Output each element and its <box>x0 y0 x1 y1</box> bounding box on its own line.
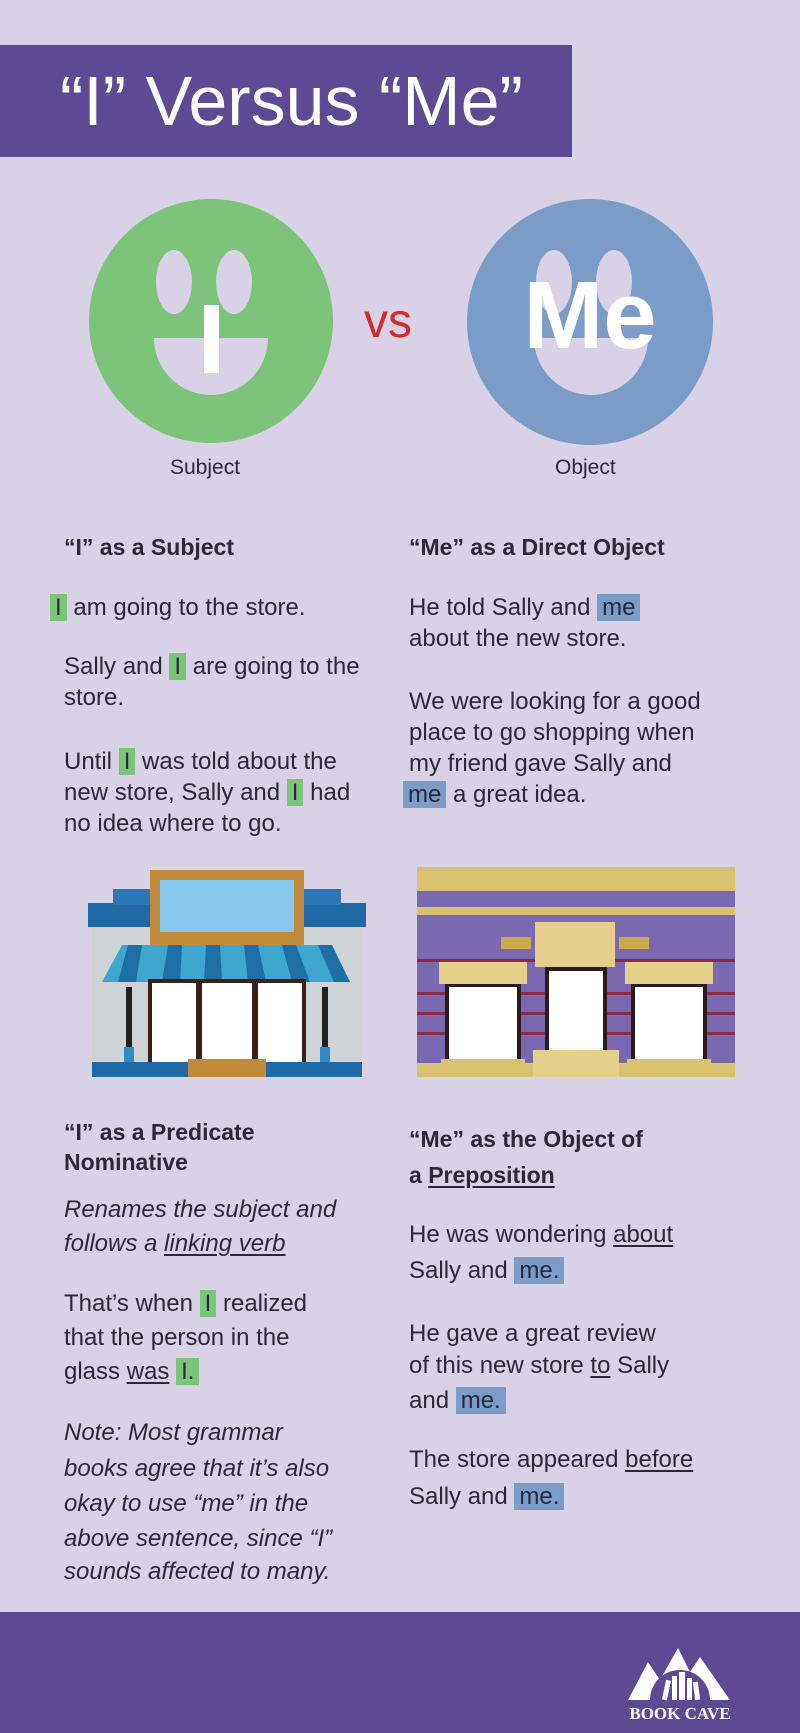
panel: I as subject <box>50 534 360 837</box>
panel: Me as object of a preposition: He gave a great review <box>409 1320 656 1347</box>
panel: I as predicate nominative: okay to use “me” in the <box>64 1490 308 1517</box>
panel: I as predicate nominative: sounds affected to many. <box>64 1558 330 1585</box>
panel: Me as direct object <box>403 534 701 808</box>
panel: Me as object of a preposition: The store appeared before <box>409 1446 693 1473</box>
icon: blue storefront <box>88 870 366 1077</box>
panel: Me as object of a preposition: of this new store to Sally <box>409 1352 669 1379</box>
panel: Me as direct object: place to go shopping when <box>409 719 695 746</box>
title bar <box>0 45 572 157</box>
icon: blue face Me: Me <box>523 262 657 369</box>
panel: I as predicate nominative: “I” as a Predicate <box>64 1119 254 1145</box>
panel: I as subject: I am going to the store. <box>55 594 305 621</box>
panel: I as subject: “I” as a Subject <box>64 534 234 560</box>
panel: Me as object of a preposition: and me. <box>409 1387 501 1414</box>
panel: I as subject: Until I was told about the <box>64 748 337 775</box>
vs: vs <box>364 295 412 348</box>
panel: I as subject: new store, Sally and I had <box>64 779 350 806</box>
panel: Me as object of a preposition <box>409 1126 694 1510</box>
footer bar <box>0 1612 800 1733</box>
panel: I as predicate nominative <box>64 1119 337 1585</box>
panel: I as predicate nominative: That’s when I realized <box>64 1290 307 1317</box>
panel: I as predicate nominative: Nominative <box>64 1149 188 1175</box>
panel: I as predicate nominative: above sentence, since “I” <box>64 1525 332 1552</box>
panel: Me as direct object: We were looking for a good <box>409 688 701 715</box>
panel: I as predicate nominative: Note: Most grammar <box>64 1419 283 1446</box>
icon: green face I <box>89 199 333 443</box>
panel: Me as object of a preposition: a Preposition <box>409 1162 555 1188</box>
panel: I as predicate nominative: glass was I. <box>64 1358 194 1385</box>
panel: Me as direct object: about the new store. <box>409 625 626 652</box>
panel: Me as direct object: me a great idea. <box>408 781 586 808</box>
panel: Me as object of a preposition: “Me” as the Object of <box>409 1126 643 1152</box>
panel: I as predicate nominative: Renames the subject and <box>64 1196 336 1223</box>
logo: Book Cave <box>628 1648 731 1722</box>
panel: Me as direct object: my friend gave Sally and <box>409 750 672 777</box>
icon: blue face Me <box>467 199 713 445</box>
panel: Me as direct object: “Me” as a Direct Object <box>409 534 665 560</box>
panel: Me as object of a preposition: Sally and me. <box>409 1483 559 1510</box>
panel: I as predicate nominative: that the person in the <box>64 1324 290 1351</box>
panel: I as predicate nominative: follows a linking verb <box>64 1230 285 1257</box>
panel: I as subject: store. <box>64 684 124 711</box>
icon: purple storefront <box>417 867 735 1077</box>
label: Object: Object <box>555 456 616 479</box>
panel: I as predicate nominative: books agree that it’s also <box>64 1455 329 1482</box>
panel: I as subject: no idea where to go. <box>64 810 282 837</box>
panel: I as subject: Sally and I are going to the <box>64 653 360 680</box>
panel: Me as object of a preposition: Sally and me. <box>409 1257 559 1284</box>
title bar: “I” Versus “Me” <box>60 62 523 140</box>
label: Subject: Subject <box>170 456 240 479</box>
panel: Me as object of a preposition: He was wondering about <box>409 1221 673 1248</box>
panel: Me as direct object: He told Sally and me <box>409 594 635 621</box>
